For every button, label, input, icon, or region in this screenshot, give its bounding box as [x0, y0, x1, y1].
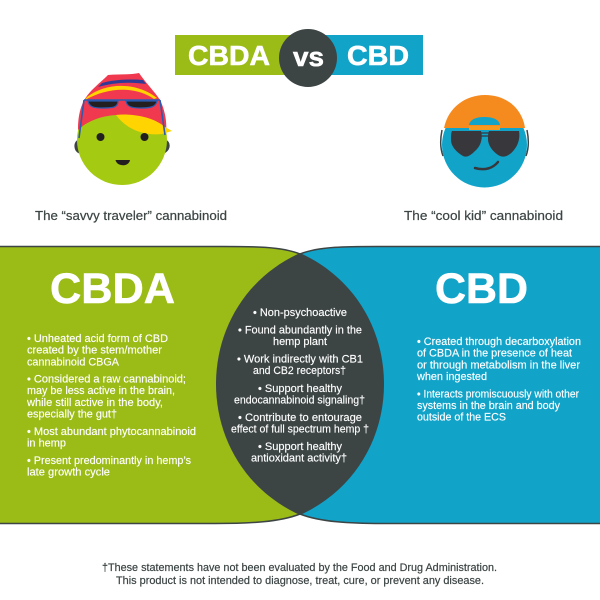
banner: CBD blue bar [320, 35, 423, 75]
text block: shared facts: • Support healthy [258, 441, 342, 453]
text block: shared facts [231, 307, 369, 464]
face [77, 95, 167, 185]
text block: shared facts: effect of full spectrum hemp † [231, 424, 369, 436]
text block: shared facts: and CB2 receptors† [253, 365, 346, 377]
text block: shared facts: hemp plant [273, 336, 328, 348]
ears [441, 130, 528, 156]
mouth [116, 160, 130, 165]
smirk [475, 162, 498, 169]
text block: CBD facts: • Created through decarboxylation [417, 336, 581, 348]
panel: CBD [300, 246, 600, 523]
footnote [102, 562, 497, 587]
panel: shared overlap [216, 253, 384, 515]
text block: CBD facts: of CBDA in the presence of heat [417, 348, 573, 360]
text block: CBDA facts: • Unheated acid form of CBD [27, 333, 168, 345]
text block: CBDA facts: while still active in the body, [26, 397, 163, 409]
banner: vs label: vs [293, 42, 324, 72]
heading: CBD: CBD [435, 265, 528, 313]
text block: CBDA facts: in hemp [27, 438, 66, 450]
ears [76, 141, 168, 152]
hat stripes [98, 79, 146, 87]
text block: shared facts: endocannabinoid signaling† [234, 394, 365, 406]
banner: CBDA green bar [175, 35, 295, 75]
text block: shared facts: • Support healthy [258, 383, 342, 395]
caption: savvy traveler: The “savvy traveler” cannabinoid [35, 209, 227, 223]
text block: CBDA facts: late growth cycle [27, 467, 110, 479]
heading: CBDA: CBDA [50, 265, 175, 313]
text block: CBDA facts [26, 333, 196, 479]
footnote: †These statements have not been evaluated by the Food and Drug Administration. [102, 562, 497, 574]
banner: vs circle [279, 29, 337, 87]
text block: CBD facts: • Interacts promiscuously with other [417, 388, 579, 400]
icon: savvy traveler face [76, 73, 172, 185]
text block: CBDA facts: may be less active in the brain, [27, 385, 175, 397]
text block: shared facts: • Work indirectly with CB1 [237, 354, 363, 366]
text block: CBDA facts: created by the stem/mother [27, 345, 162, 357]
caption: cool kid: The “cool kid” cannabinoid [404, 209, 563, 223]
text block: CBD facts: outside of the ECS [417, 412, 506, 424]
icon: cool kid face [441, 95, 528, 188]
text block: CBDA facts: • Considered a raw cannabinoid; [27, 374, 186, 386]
sunglasses [451, 131, 519, 157]
text block: CBDA facts: especially the gut† [27, 408, 117, 420]
text block: CBDA facts: • Most abundant phytocannabinoid [27, 426, 196, 438]
banner: CBD label: CBD [347, 40, 409, 71]
panel: CBDA [0, 246, 300, 523]
title banner [175, 29, 423, 87]
red hat [78, 73, 166, 133]
text block: CBDA facts: • Present predominantly in hemp’s [27, 455, 191, 467]
yellow hat tail [116, 115, 172, 134]
cap strap opening [469, 117, 500, 125]
text block: CBD facts [416, 336, 581, 424]
footnote: This product is not intended to diagnose, treat, cure, or prevent any disease. [116, 575, 484, 587]
eyes [96, 133, 104, 141]
sunglasses [79, 100, 165, 138]
text block: CBD facts: systems in the brain and body [417, 400, 560, 412]
banner: CBDA label: CBDA [188, 40, 270, 71]
text block: CBDA facts: cannabinoid CBGA [27, 356, 119, 368]
text block: shared facts: antioxidant activity† [251, 452, 347, 464]
text block: CBD facts: or through metabolism in the liver [417, 359, 580, 371]
text block: shared facts: • Non-psychoactive [253, 307, 347, 319]
text block: shared facts: • Found abundantly in the [238, 324, 362, 336]
face [442, 102, 527, 188]
text block: shared facts: • Contribute to entourage [238, 412, 362, 424]
orange cap [444, 95, 525, 128]
text block: CBD facts: when ingested [416, 371, 487, 383]
